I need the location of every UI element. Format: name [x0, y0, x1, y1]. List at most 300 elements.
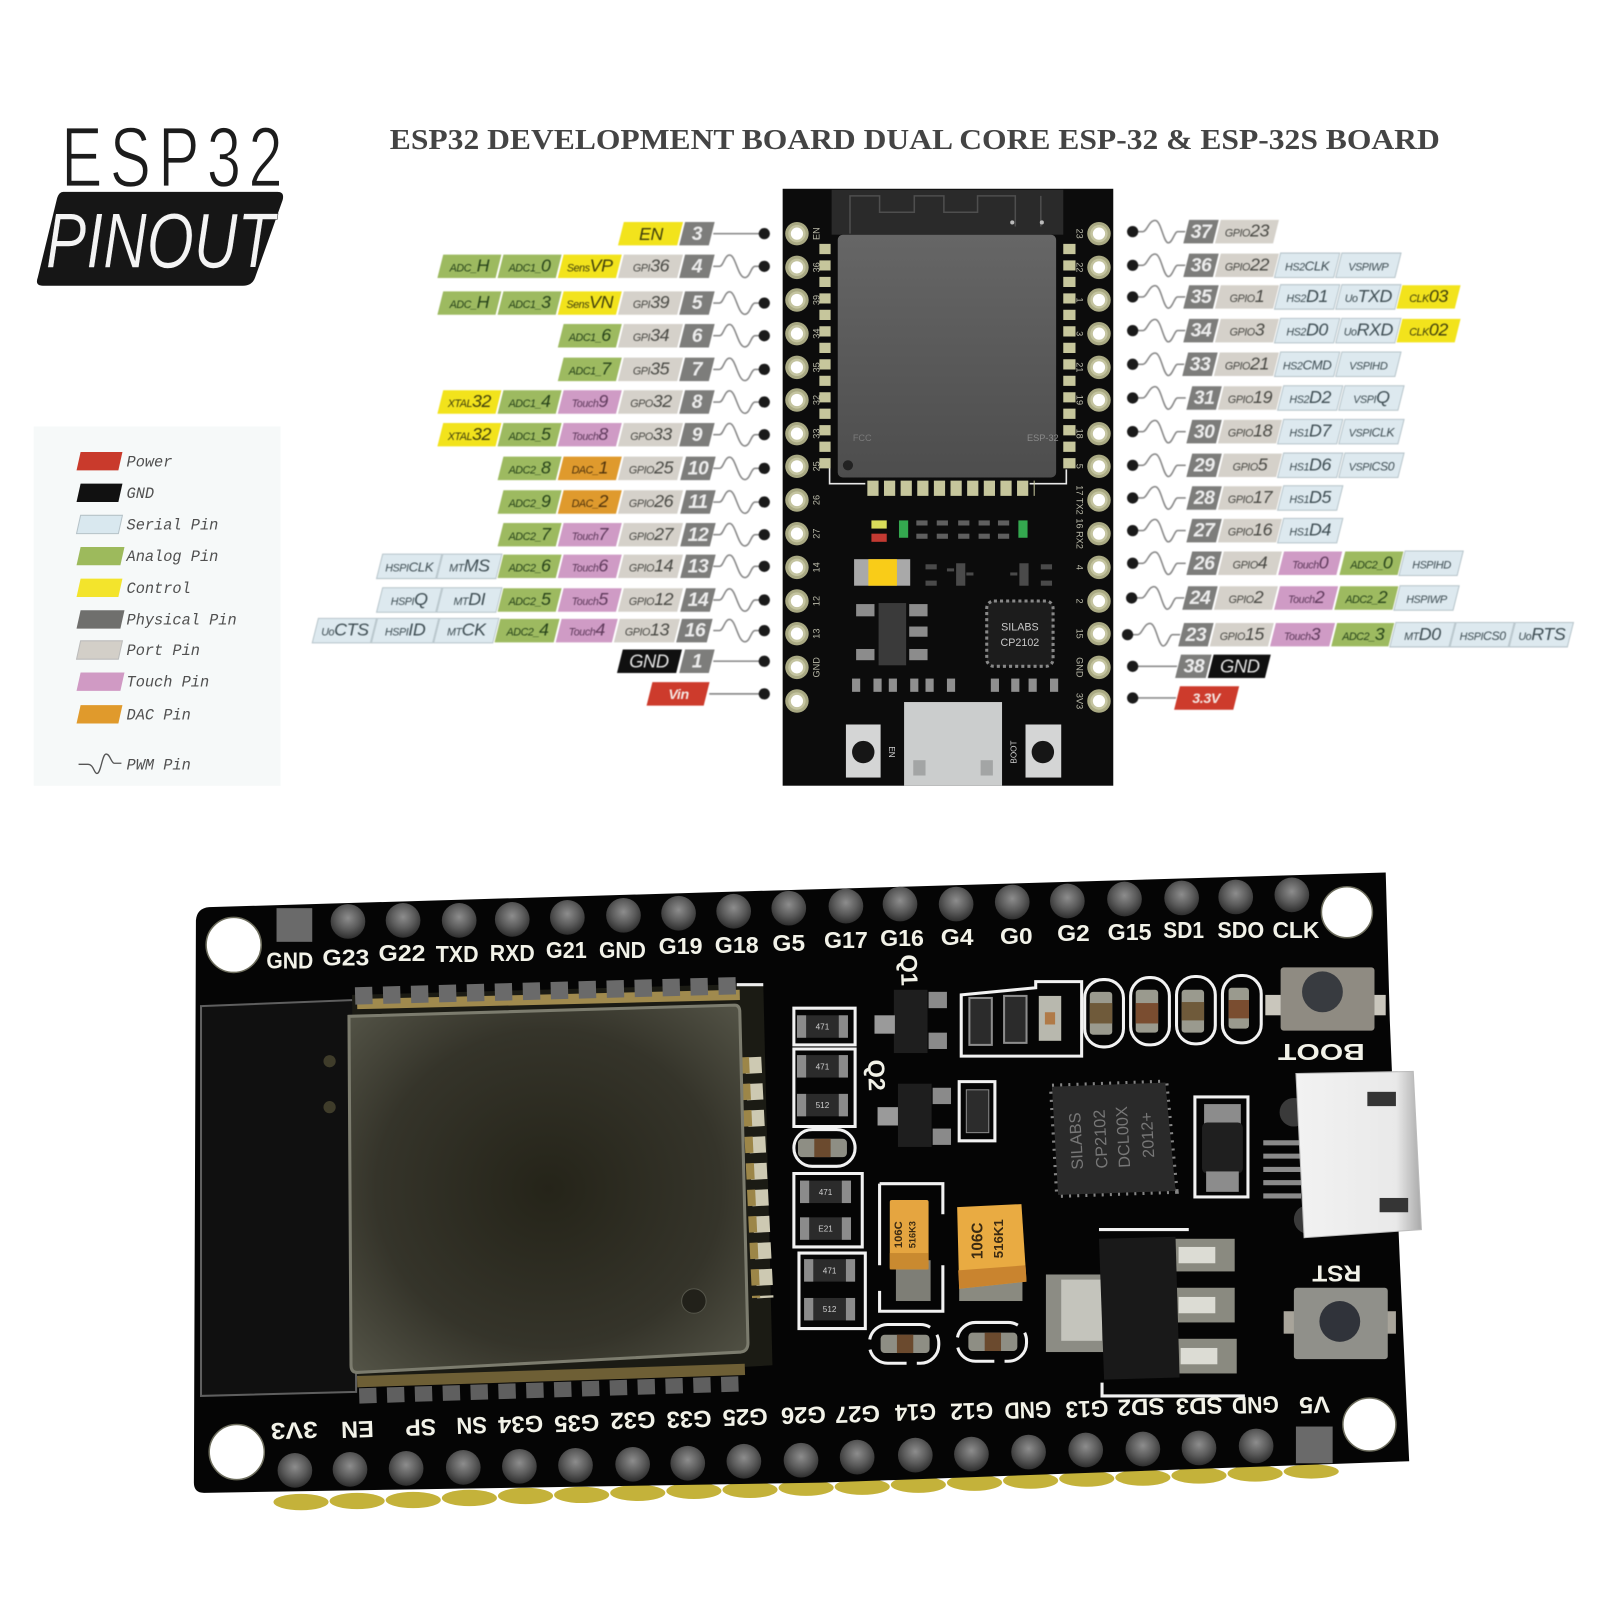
- pin row: GPI39: ADC_H: [449, 292, 490, 312]
- RST button: [1284, 1260, 1396, 1359]
- legend item: ground: [77, 484, 154, 503]
- silkscreen: bottom pin labels: G26: [780, 1401, 826, 1429]
- pin row: GPIO16: 27: [1193, 520, 1216, 542]
- silkscreen pin numbers: left: 25: [811, 461, 821, 471]
- board photo: [194, 872, 1421, 1510]
- pin row: GPI36: [437, 254, 770, 279]
- pin row: GPI36: SensVP: [567, 255, 613, 275]
- pin row: GPIO23: 37: [1191, 221, 1213, 243]
- pin row: GPIO27: Touch7: [572, 524, 609, 544]
- silkscreen pin numbers: right: 3V3: [1075, 693, 1085, 709]
- pin row: GPIO15: ADC2_3: [1341, 624, 1385, 644]
- silkscreen: top pin labels: TXD: [436, 941, 479, 967]
- pin row: GPIO16: GPIO16: [1228, 520, 1273, 540]
- pin row: GPIO17: HS1D5: [1289, 487, 1331, 507]
- ESP32 module: ESP-32: [1027, 433, 1059, 443]
- pin row: GPIO22: GPIO22: [1225, 254, 1270, 274]
- pin row: GPIO15: HSPICS0: [1460, 629, 1506, 643]
- pin row: GPIO17: 28: [1193, 487, 1215, 509]
- pin row: GPIO14: Touch6: [572, 555, 608, 575]
- pin row: GPO32: ADC1_4: [508, 391, 551, 411]
- silkscreen: bottom pin labels: SD3: [1175, 1392, 1223, 1420]
- pin row: GPIO13: HSPIID: [385, 620, 426, 640]
- silkscreen: bottom pin labels: G13: [1065, 1395, 1109, 1423]
- silkscreen: bottom pin labels: G34: [498, 1411, 544, 1438]
- silkscreen pin numbers: right: 19: [1075, 395, 1085, 405]
- silkscreen pin numbers: right: 15: [1075, 629, 1085, 639]
- pin row: GPIO13: UoCTS: [321, 620, 369, 640]
- bottom pad row: [852, 679, 1058, 692]
- pin row: GPI36: ADC_H: [449, 255, 490, 275]
- SMD row: resistors, LED and capacitors: [961, 976, 1261, 1056]
- pin row: GPIO14: MTMS: [449, 555, 490, 575]
- silkscreen: top pin labels: G18: [715, 932, 759, 958]
- pin row: GPI34: [557, 323, 770, 348]
- silkscreen pin numbers: right: 23: [1075, 229, 1085, 239]
- pin row: GPO33: XTAL32: [447, 424, 492, 444]
- pin row: GPIO27: GPIO27: [629, 524, 675, 544]
- pin row: GPIO3: HS2D0: [1286, 320, 1328, 340]
- ceramic capacitors: [869, 1322, 1027, 1363]
- legend item: serial pin: Serial Pin: [127, 517, 218, 535]
- pin row: GPIO14: [377, 554, 770, 579]
- resistors: 471: [819, 1188, 833, 1197]
- pin row: GPIO27: 12: [688, 524, 709, 546]
- silkscreen pin numbers: left: 34: [811, 329, 821, 339]
- BOOT button: BOOT: [1277, 1039, 1365, 1065]
- CP2102 chip: 2012+: [1138, 1112, 1158, 1158]
- pin row: GPIO4: 26: [1193, 552, 1215, 574]
- pin row: GND: [1127, 654, 1271, 679]
- pin row: GPO32: Touch9: [572, 391, 608, 411]
- pin row: 3.3V: 3.3V: [1192, 691, 1222, 707]
- pin row: GPIO5: 29: [1193, 454, 1215, 476]
- silkscreen pin numbers: right: 1: [1075, 297, 1085, 303]
- CP2102 chip: SILABS: [1066, 1112, 1087, 1170]
- silkscreen: bottom pin labels: EN: [341, 1416, 374, 1443]
- silkscreen pin numbers: left: 12: [811, 596, 821, 606]
- silkscreen: top pin labels: GND: [599, 937, 646, 963]
- legend item: touch pin: [77, 672, 209, 692]
- silkscreen pin numbers: right: 2: [1075, 598, 1085, 604]
- pin row: GPO32: GPO32: [630, 391, 672, 411]
- silkscreen: top pin labels: G17: [824, 927, 868, 953]
- pin row: GPIO23: GPIO23: [1225, 221, 1270, 241]
- logo: ESP32 PINOUT: [37, 109, 290, 286]
- pin row: GPI35: 7: [692, 359, 704, 381]
- pin row: 3.3V: [1127, 686, 1240, 710]
- pin row: GPI35: GPI35: [633, 358, 670, 378]
- transistors: [926, 563, 1052, 586]
- pin row: GPIO26: 11: [688, 491, 708, 513]
- ESP32 module: FCC: [853, 433, 872, 443]
- pin row: GPIO13: 16: [685, 620, 706, 642]
- CP2102 chip: [1052, 1083, 1176, 1195]
- micro USB connector: [1263, 1071, 1421, 1238]
- pin row: GPIO27: [497, 522, 770, 547]
- legend item: touch pin: Touch Pin: [127, 674, 209, 692]
- legend item: port pin: Port Pin: [127, 642, 200, 660]
- silkscreen pin numbers: left: 14: [811, 562, 821, 572]
- pin row: GPIO13: GPIO13: [625, 620, 670, 640]
- EN button: [846, 724, 896, 778]
- USB connector: [904, 702, 1002, 786]
- bottom header pins: [278, 1427, 1333, 1488]
- pin row: GPIO12: GPIO12: [629, 589, 674, 609]
- pin row: GPIO21: [1127, 352, 1401, 377]
- pin row: GPIO4: HSPIHD: [1412, 559, 1451, 571]
- pin row: GPIO2: HSPIWP: [1406, 594, 1448, 606]
- pin row: GPIO17: GPIO17: [1228, 487, 1274, 507]
- silkscreen: bottom pin labels: 3V3: [270, 1417, 318, 1444]
- silkscreen: bottom pin labels: GND: [1231, 1391, 1279, 1419]
- legend item: power: [77, 452, 172, 471]
- title: ESP32 DEVELOPMENT BOARD DUAL CORE ESP-32 & ESP-32S BOARD: [390, 125, 1440, 156]
- silkscreen: top pin labels: GND: [266, 947, 313, 973]
- silkscreen pin numbers: right: 3: [1075, 331, 1085, 336]
- pin labels: left side: [312, 221, 770, 706]
- transistors Q1 and Q2: [863, 954, 995, 1147]
- pin row: GPIO15: 23: [1185, 624, 1207, 646]
- pin labels: right side: [1122, 219, 1573, 710]
- pin row: GPO32: 8: [692, 391, 703, 413]
- ESP32 module: [825, 235, 1069, 488]
- pin row: GPIO13: MTCK: [447, 620, 487, 640]
- silkscreen pin numbers: right: 4: [1075, 565, 1085, 570]
- silkscreen pin numbers: right: 16 RX2: [1075, 518, 1085, 549]
- voltage regulator: [1046, 1230, 1245, 1396]
- legend item: PWM pin: PWM Pin: [127, 756, 191, 774]
- pin row: GND: GND: [629, 650, 669, 671]
- voltage regulator: [856, 603, 928, 665]
- pin row: GND: [616, 649, 770, 673]
- silkscreen pin numbers: right: 22: [1075, 262, 1085, 272]
- resistors: [794, 1008, 865, 1329]
- pin row: EN: EN: [639, 224, 664, 244]
- tantalum capacitors: 516K1: [991, 1219, 1006, 1258]
- pin row: GPIO2: ADC2_2: [1344, 587, 1388, 607]
- pin row: GPIO15: GPIO15: [1220, 624, 1264, 644]
- pin row: GPIO25: [497, 456, 770, 481]
- pin row: GPO33: GPO33: [630, 424, 672, 444]
- pin row: GPIO13: Touch4: [569, 620, 605, 640]
- silkscreen: top pin labels: G5: [772, 930, 805, 956]
- pin row: GPIO19: GPIO19: [1228, 387, 1273, 407]
- silkscreen pin numbers: left: 27: [811, 529, 821, 539]
- legend item: port pin: [77, 641, 200, 660]
- LEDs and small parts: [871, 520, 1028, 542]
- pin row: GPIO21: HS2CMD: [1283, 357, 1332, 372]
- silkscreen: bottom pin labels: V5: [1299, 1391, 1330, 1418]
- pin row: GPIO15: Touch3: [1284, 624, 1321, 644]
- silkscreen pin numbers: left: 39: [811, 295, 821, 305]
- pin row: GPIO5: VSPICS0: [1349, 459, 1395, 473]
- pin row: GPIO14: GPIO14: [629, 555, 674, 575]
- legend item: analog pin: [77, 547, 218, 566]
- pin row: GND: 1: [692, 650, 702, 672]
- pin row: GPI34: 6: [692, 325, 703, 347]
- silkscreen pin numbers: right: GND: [1075, 657, 1085, 678]
- pin row: GPI34: GPI34: [633, 325, 670, 345]
- silkscreen: bottom pin labels: SN: [456, 1412, 487, 1439]
- mounting holes: [206, 887, 1396, 1480]
- pin row: GPIO22: VSPIWP: [1348, 261, 1389, 273]
- silkscreen: top pin labels: G22: [379, 940, 426, 966]
- pin row: GPIO12: 14: [688, 589, 709, 611]
- legend item: control: Control: [127, 580, 191, 598]
- transistors Q1 and Q2: Q2: [863, 1059, 890, 1091]
- board diagram: [783, 189, 1113, 786]
- pin row: GPIO17: [1127, 486, 1343, 510]
- resistors: 512: [816, 1101, 830, 1110]
- pin row: GPI39: SensVN: [566, 292, 614, 312]
- silkscreen: top pin labels: RXD: [490, 940, 535, 966]
- pin row: GPI36: GPI36: [633, 255, 670, 275]
- silkscreen: top pin labels: G15: [1108, 919, 1152, 945]
- pin row: GPI35: ADC1_7: [568, 358, 612, 378]
- pin row: GPIO4: GPIO4: [1233, 552, 1268, 572]
- silkscreen pin numbers: left: 36: [811, 262, 821, 272]
- legend item: serial pin: [77, 515, 218, 535]
- pin row: GPIO2: 24: [1189, 587, 1211, 609]
- silkscreen: top pin labels: SD1: [1163, 917, 1204, 943]
- pin row: GPIO1: HS2D1: [1286, 286, 1328, 306]
- silkscreen pin numbers: left: 35: [811, 362, 821, 372]
- pin row: GPIO3: GPIO3: [1230, 320, 1265, 340]
- tantalum capacitors: 106C: [970, 1223, 987, 1259]
- silkscreen: top pin labels: [266, 917, 1319, 973]
- pin row: GPIO26: ADC2_9: [508, 491, 551, 511]
- pin row: GPIO2: Touch2: [1288, 587, 1325, 607]
- yellow header pins: [273, 1464, 1339, 1510]
- pin row: GPIO19: 31: [1194, 387, 1214, 409]
- silkscreen: bottom pin labels: G27: [835, 1400, 880, 1428]
- tantalum capacitors: 106C: [893, 1221, 905, 1248]
- pin row: EN: [617, 221, 770, 246]
- silkscreen: top pin labels: CLK: [1272, 917, 1319, 943]
- tantalum capacitor: [854, 559, 910, 586]
- pin row: GPIO5: HS1D6: [1289, 454, 1331, 474]
- BOOT button: [1265, 967, 1386, 1065]
- pin row: GPIO26: GPIO26: [629, 491, 674, 511]
- silkscreen: bottom pin labels: G25: [722, 1403, 768, 1431]
- CP2102 chip: [987, 601, 1053, 666]
- legend item: physical pin: Physical Pin: [127, 611, 237, 629]
- pin row: GPIO26: DAC_2: [572, 491, 608, 511]
- pin row: GPIO15: [1122, 622, 1573, 647]
- pin row: GPI39: ADC1_3: [508, 292, 551, 312]
- pin row: GPIO22: 36: [1191, 254, 1212, 276]
- top header pins: [277, 878, 1309, 942]
- legend item: analog pin: Analog Pin: [126, 548, 218, 566]
- resistors: E21: [818, 1225, 833, 1234]
- pin row: GPIO3: UoRXD: [1344, 320, 1394, 340]
- pin row: GPIO18: [1127, 419, 1404, 444]
- legend item: control: [77, 579, 191, 598]
- pin row: GPO33: ADC1_5: [508, 424, 551, 444]
- RST button: RST: [1312, 1260, 1361, 1286]
- pin row: GPIO2: [1126, 586, 1459, 610]
- resistors: 471: [816, 1062, 830, 1071]
- pin row: GPIO22: HS2CLK: [1285, 258, 1331, 273]
- pin row: GPIO22: [1127, 253, 1401, 278]
- pin row: GPIO18: HS1D7: [1289, 421, 1332, 441]
- silkscreen: top pin labels: G23: [322, 944, 369, 970]
- header holes: left: [785, 222, 809, 713]
- silkscreen pin numbers: left: 13: [811, 629, 821, 639]
- resistors: 512: [823, 1305, 837, 1314]
- pin row: GPIO1: CLK03: [1409, 286, 1448, 306]
- pin row: GPIO12: HSPIQ: [391, 589, 428, 609]
- silkscreen: top pin labels: G2: [1057, 920, 1090, 946]
- legend item: power: Power: [127, 453, 172, 471]
- silkscreen: bottom pin labels: G12: [950, 1397, 994, 1425]
- pin row: GPI35: [557, 357, 770, 382]
- antenna area: [832, 190, 1063, 235]
- silkscreen: bottom pin labels: SP: [405, 1414, 436, 1441]
- silkscreen: bottom pin labels: SD2: [1117, 1393, 1165, 1421]
- silkscreen pin numbers: left: 33: [811, 429, 821, 439]
- resistors: 471: [816, 1023, 830, 1032]
- pin row: GPIO14: 13: [688, 555, 709, 577]
- legend item: PWM pin: [79, 754, 191, 774]
- pin row: GND: 38: [1184, 655, 1205, 677]
- silkscreen pin numbers: right: 17 TX2: [1075, 485, 1085, 515]
- pin row: GPI36: 4: [691, 255, 703, 277]
- silkscreen pin numbers: left: GND: [811, 657, 821, 678]
- pin row: GPIO12: [377, 588, 770, 612]
- pin row: GPIO16: [1127, 518, 1343, 543]
- silkscreen: bottom pin labels: G14: [895, 1398, 936, 1426]
- pin row: GPIO3: CLK02: [1409, 320, 1448, 340]
- silkscreen: bottom pin labels: G35: [554, 1410, 600, 1437]
- panel: legend: [34, 427, 281, 786]
- pin row: GPIO4: Touch0: [1292, 552, 1329, 572]
- pin row: GPIO1: [1127, 285, 1461, 309]
- silkscreen pin numbers: left: EN: [811, 227, 821, 240]
- silkscreen pin numbers: left: 32: [811, 395, 821, 405]
- silkscreen: bottom pin labels: [270, 1391, 1330, 1444]
- pin row: GPIO16: HS1D4: [1289, 520, 1331, 540]
- pin row: GPIO3: 34: [1191, 320, 1212, 342]
- resistors: 471: [823, 1266, 837, 1275]
- pin row: GPIO14: ADC2_6: [508, 555, 551, 575]
- tantalum capacitors: 516K3: [907, 1221, 917, 1248]
- silkscreen pin numbers: left: [811, 227, 821, 678]
- pin row: GPI39: [437, 291, 770, 315]
- pin row: GPIO25: 10: [688, 457, 709, 479]
- pin row: GPIO19: [1127, 386, 1404, 410]
- PCB: [194, 872, 1409, 1493]
- silkscreen pin numbers: right: [1075, 229, 1085, 709]
- silkscreen: top pin labels: G21: [546, 937, 587, 963]
- pin row: GPO32: XTAL32: [447, 391, 492, 411]
- pin row: GPI39: 5: [692, 292, 703, 314]
- pin row: GPI36: ADC1_0: [508, 255, 551, 275]
- CP2102 chip: CP2102: [1091, 1109, 1112, 1169]
- header holes: right: [1087, 222, 1111, 713]
- silkscreen pin numbers: right: 18: [1075, 429, 1085, 439]
- logo: ESP32 PINOUT: PINOUT: [46, 198, 278, 284]
- silkscreen: bottom pin labels: GND: [1004, 1396, 1052, 1424]
- pin row: GPIO12: Touch5: [572, 589, 608, 609]
- pin row: GPIO15: MTD0: [1404, 624, 1441, 644]
- pin row: GPIO15: UoRTS: [1518, 624, 1566, 644]
- silkscreen: top pin labels: G0: [1000, 923, 1033, 949]
- pin row: GPIO4: [1127, 551, 1463, 576]
- pin row: GPIO25: GPIO25: [629, 457, 674, 477]
- silkscreen: bottom pin labels: G32: [610, 1406, 656, 1434]
- pin row: GPIO26: [497, 490, 770, 514]
- legend item: ground: GND: [127, 485, 154, 503]
- CP2102 chip: DCL00X: [1113, 1106, 1134, 1168]
- pin row: GPIO21: GPIO21: [1225, 353, 1269, 373]
- silkscreen: top pin labels: G19: [659, 933, 703, 959]
- logo: ESP32 PINOUT: ESP32: [61, 109, 290, 205]
- diode: [1195, 1097, 1248, 1197]
- pin row: GPIO18: VSPICLK: [1349, 426, 1395, 440]
- pin row: GPIO21: 33: [1190, 353, 1211, 375]
- pin row: GPIO21: VSPIHD: [1349, 360, 1388, 372]
- pin row: Vin: [646, 682, 770, 706]
- pin row: GPO33: Touch8: [572, 424, 608, 444]
- pin row: GND: GND: [1220, 655, 1260, 676]
- CP2102 chip: SILABS: [1001, 622, 1039, 634]
- pin row: GPIO18: GPIO18: [1228, 421, 1273, 441]
- BOOT button: BOOT: [1009, 740, 1018, 764]
- pin row: GPIO1: GPIO1: [1230, 286, 1264, 306]
- legend item: DAC pin: [77, 705, 191, 724]
- silkscreen: bottom pin labels: G33: [666, 1405, 712, 1433]
- pin row: GPIO12: MTDI: [454, 589, 486, 609]
- pin row: GPIO13: [312, 618, 770, 643]
- pin row: GPIO12: ADC2_5: [508, 589, 551, 609]
- silkscreen: top pin labels: SDO: [1217, 917, 1264, 943]
- pin row: GPIO25: ADC2_8: [508, 457, 551, 477]
- pin row: GPIO19: VSPIQ: [1353, 387, 1390, 407]
- pin row: GPO32: [437, 390, 770, 414]
- legend item: physical pin: [77, 610, 237, 629]
- EN button: EN: [887, 746, 896, 758]
- pin row: EN: 3: [692, 223, 703, 245]
- silkscreen pin numbers: right: 21: [1075, 362, 1085, 372]
- antenna area: [201, 1000, 356, 1396]
- legend item: DAC pin: DAC Pin: [127, 706, 191, 724]
- pin row: GPIO25: DAC_1: [572, 457, 608, 477]
- silkscreen: top pin labels: G4: [941, 924, 973, 950]
- silkscreen: top pin labels: G16: [880, 925, 924, 951]
- pin row: GPO33: [437, 422, 770, 447]
- pin row: GPIO13: ADC2_4: [506, 620, 549, 640]
- pin row: GPIO3: [1127, 318, 1461, 343]
- pin row: GPIO1: 35: [1191, 286, 1212, 308]
- tantalum capacitors: [880, 1184, 1027, 1311]
- pin row: GPIO5: [1127, 453, 1404, 478]
- pin row: GPI39: GPI39: [633, 292, 670, 312]
- pin row: GPI34: ADC1_6: [568, 325, 611, 345]
- pin row: GPIO19: HS2D2: [1289, 387, 1331, 407]
- pin row: GPIO18: 30: [1194, 421, 1215, 443]
- pin row: GPIO1: UoTXD: [1345, 286, 1393, 306]
- silkscreen pin numbers: left: 26: [811, 495, 821, 505]
- pin row: GPIO2: GPIO2: [1229, 587, 1264, 607]
- CP2102 chip: CP2102: [1001, 637, 1039, 649]
- pin row: GPIO4: ADC2_0: [1349, 552, 1393, 572]
- pin row: GPIO5: GPIO5: [1233, 454, 1268, 474]
- BOOT button: [1009, 724, 1061, 778]
- pin row: GPIO23: [1127, 219, 1280, 244]
- silkscreen pin numbers: right: 5: [1075, 464, 1085, 469]
